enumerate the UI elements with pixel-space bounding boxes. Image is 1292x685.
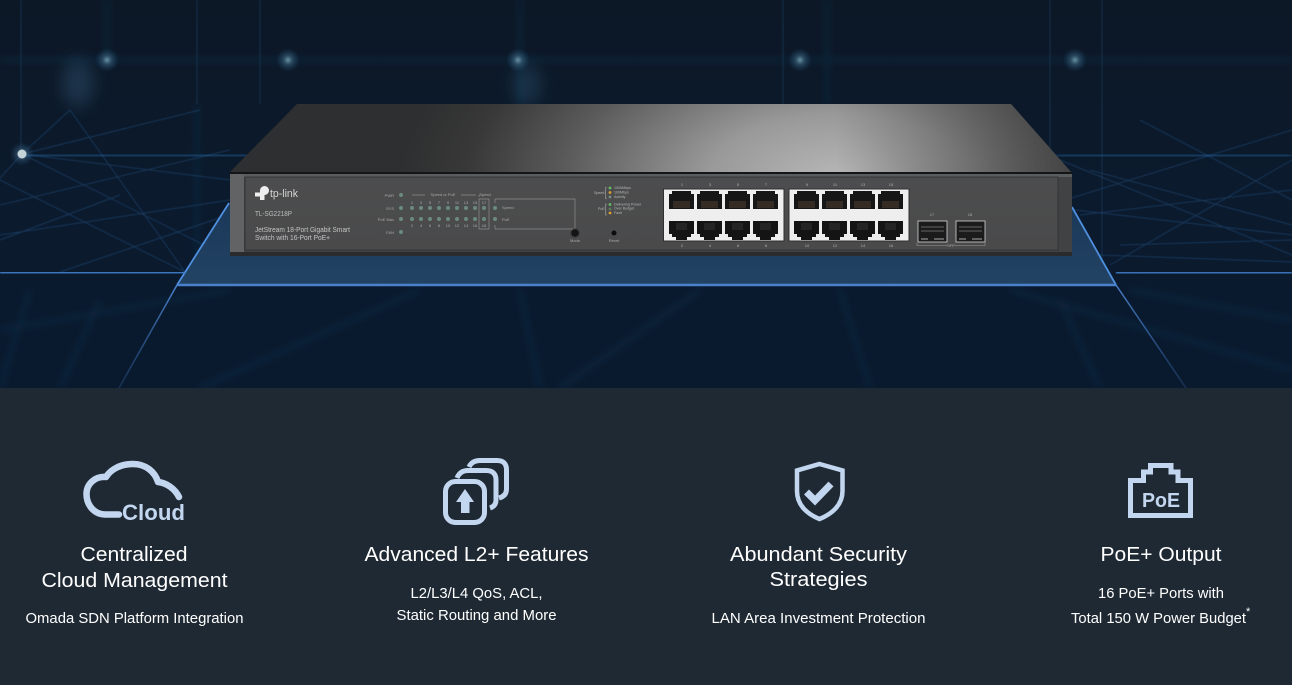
LED legend: 100Mbps — [614, 190, 629, 194]
port numbers: 18 — [968, 212, 973, 217]
LED legend: Delivering Power — [614, 202, 642, 206]
tp-link logo: tp-link — [270, 188, 298, 200]
LED legend: PoE — [598, 207, 605, 211]
port numbers: 15 — [889, 182, 894, 187]
icon: stacked layers with arrow — [446, 460, 506, 522]
LED indicators: Speed — [502, 205, 514, 210]
feature: L2+ features — [364, 460, 588, 624]
LED legend: Over Budget — [614, 206, 634, 210]
icon: cloud: Cloud — [122, 500, 185, 525]
heading: Cloud Management — [42, 570, 228, 592]
LED indicators: 18 — [482, 223, 487, 228]
LED legend: Activity — [614, 195, 626, 199]
port numbers: 5 — [737, 182, 740, 187]
LED indicators: PoE — [502, 217, 510, 222]
LED legend: 1000Mbps — [614, 186, 631, 190]
LED indicators: 16 — [473, 223, 478, 228]
LED indicators: 11 — [455, 200, 460, 205]
product description: JetStream 18-Port Gigabit Smart — [255, 225, 350, 234]
description: Static Routing and More — [396, 607, 556, 624]
switch top cover — [230, 104, 1071, 172]
LED indicators: 3 — [420, 200, 423, 205]
port numbers: 12 — [833, 243, 838, 248]
description: * — [1246, 606, 1251, 618]
port numbers: 11 — [833, 182, 838, 187]
heading: PoE+ Output — [1100, 544, 1222, 566]
switch front chassis — [230, 172, 1072, 256]
port numbers: 3 — [709, 182, 712, 187]
port numbers: SFP — [947, 243, 955, 248]
icon: shield with check — [797, 464, 842, 519]
product description: Switch with 16-Port PoE+ — [255, 233, 330, 242]
LED indicators: 6 — [429, 223, 432, 228]
port numbers: 14 — [861, 243, 866, 248]
LED indicators: 8 — [438, 223, 441, 228]
LED legend — [594, 186, 642, 215]
LED indicators: Speed — [479, 192, 491, 197]
LED indicators: FAN — [386, 230, 394, 235]
RJ45 port block 2 — [789, 189, 909, 241]
glowing nodes — [10, 48, 1087, 166]
description — [1071, 585, 1251, 627]
port numbers: 7 — [765, 182, 768, 187]
heading: Centralized — [80, 544, 188, 566]
port numbers: 4 — [709, 243, 712, 248]
icon: PoE port: PoE — [1142, 490, 1180, 512]
port numbers: 16 — [889, 243, 894, 248]
RJ45 port block 1 — [664, 189, 784, 241]
port numbers: 13 — [861, 182, 866, 187]
port numbers: 1 — [681, 182, 684, 187]
network grid lines — [0, 0, 1292, 388]
feature: cloud management — [26, 464, 244, 627]
LED indicators: 10 — [446, 223, 451, 228]
network switch — [230, 104, 1072, 256]
description: Total 150 W Power Budget — [1071, 610, 1247, 627]
LED indicators: Mode — [570, 238, 581, 243]
heading — [730, 544, 907, 591]
LED legend: Fault — [614, 211, 622, 215]
icon: PoE port — [1130, 466, 1190, 516]
heading: Abundant Security — [730, 544, 907, 566]
LED indicators: SYS — [386, 206, 394, 211]
mode and reset buttons — [571, 229, 616, 237]
platform under the switch — [0, 203, 1292, 388]
feature: PoE output — [1071, 466, 1251, 627]
port numbers: 17 — [930, 212, 935, 217]
heading: Strategies — [770, 569, 868, 591]
port numbers: 2 — [681, 243, 684, 248]
features panel — [0, 388, 1292, 685]
port numbers: 6 — [737, 243, 740, 248]
model name: TL-SG2218P — [255, 211, 292, 218]
description: 16 PoE+ Ports with — [1098, 585, 1224, 602]
port numbers — [681, 182, 973, 248]
description — [396, 585, 556, 624]
LED indicators: 4 — [420, 223, 423, 228]
port numbers: 8 — [765, 243, 768, 248]
icon: cloud — [86, 464, 185, 525]
LED indicators — [378, 192, 620, 243]
LED indicators: 17 — [482, 200, 487, 205]
LED indicators: 15 — [473, 200, 478, 205]
description: L2/L3/L4 QoS, ACL, — [410, 585, 542, 602]
hero background — [0, 0, 1292, 388]
LED indicators: 5 — [429, 200, 432, 205]
LED indicators: 9 — [447, 200, 450, 205]
LED indicators: 13 — [464, 200, 469, 205]
LED indicators: Speed or PoE — [431, 192, 456, 197]
description: Omada SDN Platform Integration — [26, 610, 244, 627]
LED legend: Speed — [594, 191, 604, 195]
LED indicators: 14 — [464, 223, 469, 228]
port numbers: 10 — [805, 243, 810, 248]
description: LAN Area Investment Protection — [712, 610, 926, 627]
heading — [42, 544, 228, 592]
LED indicators: 2 — [411, 223, 414, 228]
port numbers: 9 — [806, 182, 809, 187]
brand and model — [255, 186, 350, 242]
product description — [255, 225, 350, 242]
LED indicators: PWR — [385, 193, 394, 198]
LED indicators: 12 — [455, 223, 460, 228]
heading: Advanced L2+ Features — [364, 544, 588, 566]
LED indicators: 7 — [438, 200, 441, 205]
SFP ports — [917, 221, 985, 246]
front panel — [245, 177, 1058, 250]
LED indicators: PoE Max — [378, 217, 394, 222]
feature: security — [712, 464, 926, 627]
LED indicators: Reset — [609, 238, 620, 243]
LED indicators: 1 — [411, 200, 414, 205]
